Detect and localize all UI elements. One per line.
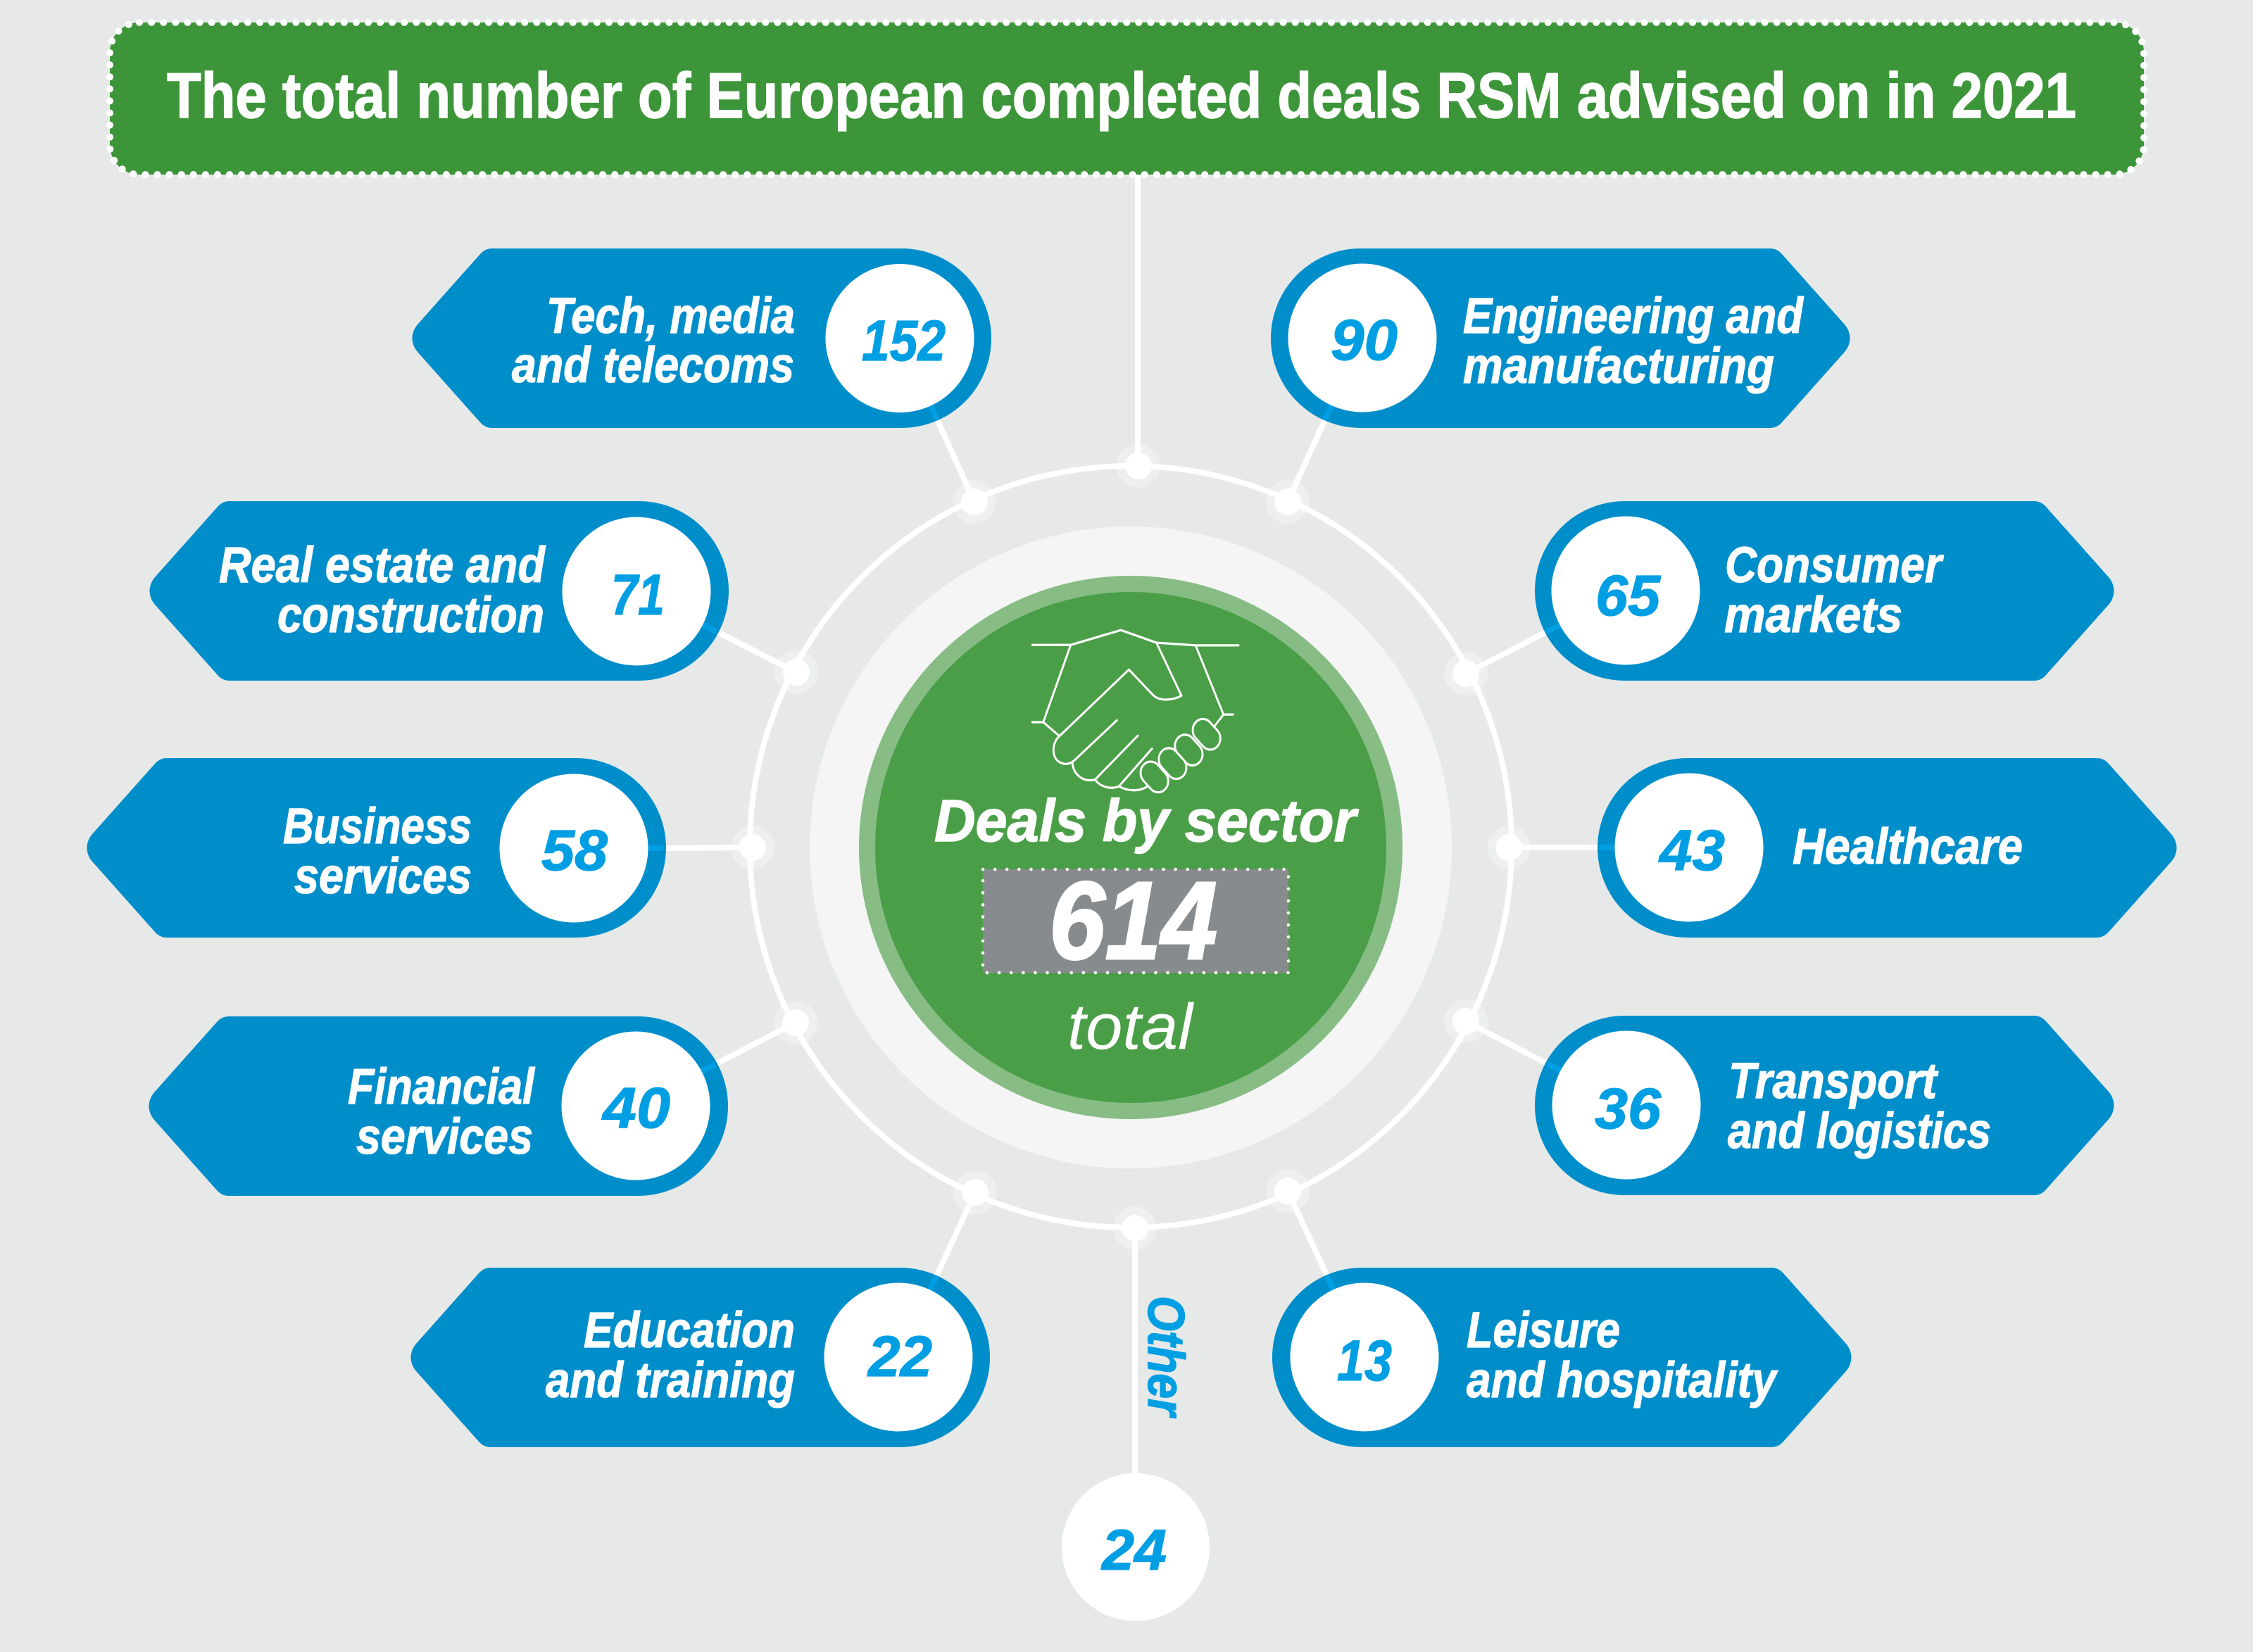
total label: total bbox=[1067, 991, 1195, 1063]
panel: financial services bbox=[149, 1016, 728, 1196]
sector label bbox=[546, 1303, 795, 1408]
central hub bbox=[810, 527, 1452, 1168]
number: 43 bbox=[1658, 819, 1725, 883]
number: 71 bbox=[611, 563, 665, 627]
ring node halos bbox=[731, 444, 1531, 1250]
connector lines bbox=[663, 175, 1600, 1478]
title banner bbox=[110, 23, 2144, 175]
panel: healthcare bbox=[1598, 758, 2177, 938]
number: 65 bbox=[1595, 564, 1661, 628]
panel: tech, media and telecoms bbox=[413, 248, 991, 428]
sector label: Transport bbox=[1728, 1054, 1939, 1109]
sector label: and telecoms bbox=[512, 338, 794, 393]
sector label: Education bbox=[584, 1303, 795, 1358]
ring nodes bbox=[739, 453, 1522, 1242]
heading: deals by sector: Deals by sector bbox=[934, 788, 1359, 854]
sector label bbox=[1728, 1054, 1991, 1159]
sector label: and hospitality bbox=[1467, 1353, 1778, 1408]
sector label: Real estate and bbox=[219, 538, 546, 593]
sector label: markets bbox=[1724, 588, 1902, 643]
panel: engineering and manufacturing bbox=[1271, 248, 1850, 428]
panel: business services bbox=[87, 758, 666, 938]
sector label: and logistics bbox=[1728, 1104, 1991, 1159]
number: 13 bbox=[1337, 1329, 1392, 1393]
sector label: Engineering and bbox=[1463, 289, 1804, 344]
sector label: manufacturing bbox=[1463, 339, 1774, 394]
panel: consumer markets bbox=[1535, 501, 2114, 681]
number: 58 bbox=[541, 819, 608, 883]
sector label: Healthcare bbox=[1793, 819, 2023, 875]
sector label bbox=[512, 289, 795, 393]
sector label: Other bbox=[1137, 1296, 1194, 1418]
number: 40 bbox=[601, 1076, 670, 1140]
sector label bbox=[219, 538, 546, 643]
sector label: Leisure bbox=[1467, 1303, 1620, 1358]
sector label: and training bbox=[546, 1353, 795, 1408]
sector label: Tech, media bbox=[546, 289, 795, 344]
number: 90 bbox=[1331, 308, 1398, 372]
icon: handshake bbox=[1032, 630, 1238, 797]
sector label bbox=[348, 1059, 535, 1165]
sector label: services bbox=[356, 1109, 533, 1165]
panel: real estate and construction bbox=[149, 501, 729, 681]
total number: 614 bbox=[1049, 859, 1217, 983]
number: 152 bbox=[862, 309, 946, 373]
number: 22 bbox=[867, 1325, 932, 1389]
panel: leisure and hospitality bbox=[1272, 1268, 1852, 1447]
number: 36 bbox=[1595, 1077, 1662, 1141]
sector label bbox=[1467, 1303, 1778, 1408]
sector label bbox=[283, 799, 472, 904]
sector label bbox=[1463, 289, 1804, 394]
outer ring bbox=[750, 466, 1512, 1228]
sector label: services bbox=[294, 849, 472, 904]
sector label: Consumer bbox=[1725, 538, 1944, 593]
total box bbox=[983, 869, 1288, 973]
sector label: construction bbox=[277, 588, 544, 643]
panel: other bbox=[1062, 1296, 1210, 1621]
sector label: Financial bbox=[348, 1059, 535, 1115]
panel: education and training bbox=[411, 1268, 990, 1447]
sector label bbox=[1724, 538, 1944, 643]
sector label: Business bbox=[283, 799, 472, 855]
panel: transport and logistics bbox=[1535, 1016, 2114, 1195]
number: 24 bbox=[1100, 1518, 1167, 1582]
